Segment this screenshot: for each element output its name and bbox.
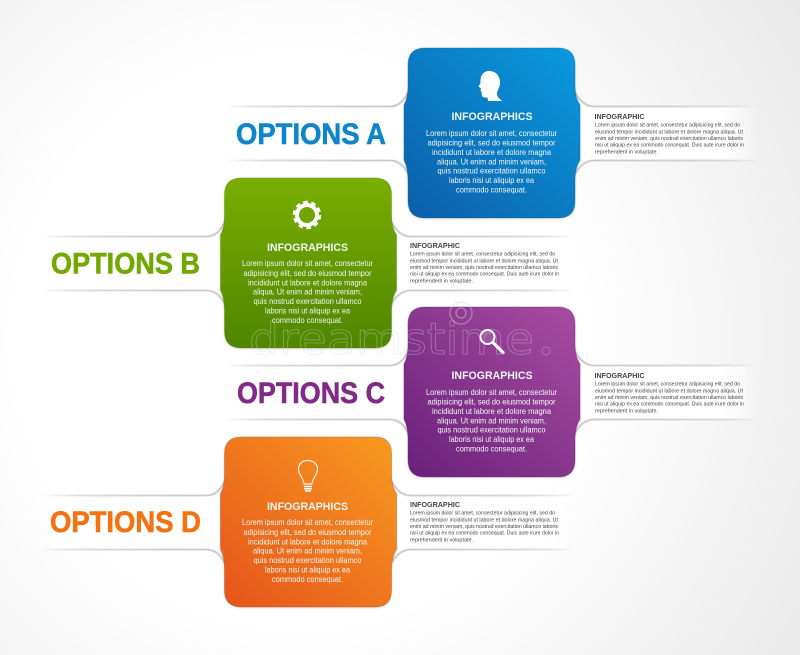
- text block: option D side note: INFOGRAPHIC: [410, 500, 461, 509]
- text block: incididunt ut labore et dolore magna: [248, 538, 368, 546]
- text block: adipisicing elit, sed do eiusmod tempor: [244, 269, 372, 278]
- text block: option B side note: reprehenderit in voluptate.: [410, 278, 473, 284]
- text block: [426, 388, 557, 454]
- text block: [242, 518, 373, 584]
- text block: quis nostrud exercitation ullamco: [254, 297, 362, 306]
- text block: option D side note: enim ad minim veniam, quis nostrud exercitation ullamco laboris: [410, 524, 558, 530]
- heading: options C: OPTIONS C: [237, 377, 385, 410]
- text block: commodo consequat.: [272, 575, 343, 584]
- text block: quis nostrud exercitation ullamco: [438, 426, 546, 434]
- text block: Lorem ipsum dolor sit amet, consectetur: [242, 518, 373, 527]
- text block: option D side note: nisi ut aliquip ex ea commodo consequat. Duis aute irure dolor in: [410, 530, 559, 536]
- text block: laboris nisi ut aliquip ex ea: [449, 435, 534, 444]
- text block: aliqua. Ut enim ad minim veniam,: [253, 546, 362, 556]
- text block: Lorem ipsum dolor sit amet, consectetur: [426, 129, 557, 138]
- text block: option C side note: Lorem ipsum dolor sit amet, consectetur adipisicing elit, sed do: [595, 382, 740, 388]
- text block: adipisicing elit, sed do eiusmod tempor: [244, 528, 372, 537]
- text block: [242, 259, 373, 325]
- text block: commodo consequat.: [456, 444, 527, 454]
- heading: INFOGRAPHICS: [267, 501, 348, 513]
- text block: laboris nisi ut aliquip ex ea: [265, 306, 350, 316]
- icon: gear: [294, 202, 320, 228]
- heading: INFOGRAPHICS: [452, 111, 532, 123]
- text block: option B side note: enim ad minim veniam, quis nostrud exercitation ullamco laboris: [410, 265, 558, 271]
- text block: option B side note: nisi ut aliquip ex ea commodo consequat. Duis aute irure dolor in: [410, 272, 559, 278]
- ribbons: option A: [225, 88, 758, 178]
- text block: option C side note: reprehenderit in voluptate.: [595, 408, 658, 414]
- text block: quis nostrud exercitation ullamco: [438, 166, 546, 176]
- heading: INFOGRAPHICS: [267, 242, 348, 254]
- text block: incididunt ut labore et dolore magna: [432, 407, 552, 416]
- panel: option D card: [220, 437, 396, 608]
- text block: option D side note: [410, 500, 559, 544]
- text block: commodo consequat.: [456, 186, 527, 194]
- text block: option B side note: [410, 241, 559, 284]
- text block: Lorem ipsum dolor sit amet, consectetur: [242, 259, 373, 268]
- ribbons: option B: [42, 218, 574, 308]
- text block: option C side note: [594, 371, 744, 414]
- heading: options D: OPTIONS D: [50, 506, 201, 539]
- text block: incididunt ut labore et dolore magna: [432, 148, 552, 157]
- text block: option A side note: INFOGRAPHIC: [594, 112, 645, 121]
- text block: laboris nisi ut aliquip ex ea: [265, 566, 350, 574]
- heading: INFOGRAPHICS: [452, 370, 532, 382]
- text block: option C side note: INFOGRAPHIC: [594, 371, 645, 380]
- text block: Lorem ipsum dolor sit amet, consectetur: [426, 388, 557, 397]
- text block: commodo consequat.: [272, 316, 343, 325]
- icon: magnifier: [480, 330, 503, 352]
- heading: options A: OPTIONS A: [236, 118, 386, 151]
- heading: options B: OPTIONS B: [51, 248, 200, 280]
- text block: option D side note: eiusmod tempor incididunt ut labore et dolore magna aliqua. Ut: [410, 518, 559, 524]
- text block: option C side note: nisi ut aliquip ex ea commodo consequat. Duis aute irure dolor in: [595, 402, 744, 408]
- text block: [426, 129, 557, 194]
- text block: aliqua. Ut enim ad minim veniam,: [253, 288, 362, 296]
- text block: option D side note: Lorem ipsum dolor sit amet, consectetur adipisicing elit, sed do: [410, 510, 555, 516]
- panel: option A card: [404, 48, 580, 218]
- text block: adipisicing elit, sed do eiusmod tempor: [428, 138, 556, 148]
- ribbons: option C: [225, 347, 758, 437]
- ribbons: option D: [42, 477, 574, 567]
- text block: option B side note: INFOGRAPHIC: [410, 241, 461, 250]
- panel: option B card: [220, 178, 396, 348]
- text block: option A side note: nisi ut aliquip ex ea commodo consequat. Duis aute irure dolor in: [595, 142, 744, 148]
- text block: aliqua. Ut enim ad minim veniam,: [437, 416, 546, 426]
- panel: option C card: [404, 307, 580, 478]
- icon: light bulb: [298, 460, 318, 491]
- text block: adipisicing elit, sed do eiusmod tempor: [428, 398, 556, 406]
- text block: option D side note: reprehenderit in voluptate.: [410, 538, 473, 544]
- text block: option A side note: [594, 112, 744, 156]
- watermark: dreamstime: [249, 314, 534, 365]
- text block: incididunt ut labore et dolore magna: [248, 278, 368, 288]
- text block: option C side note: eiusmod tempor incididunt ut labore et dolore magna aliqua. Ut: [595, 388, 744, 394]
- text block: option B side note: Lorem ipsum dolor sit amet, consectetur adipisicing elit, sed do: [410, 252, 555, 258]
- text block: option A side note: Lorem ipsum dolor sit amet, consectetur adipisicing elit, sed do: [595, 122, 740, 128]
- text block: quis nostrud exercitation ullamco: [254, 556, 362, 565]
- text block: option A side note: reprehenderit in voluptate.: [595, 150, 658, 156]
- text block: option C side note: enim ad minim veniam, quis nostrud exercitation ullamco laboris: [595, 395, 743, 401]
- text block: option B side note: eiusmod tempor incididunt ut labore et dolore magna aliqua. Ut: [410, 258, 559, 264]
- text block: option A side note: eiusmod tempor incididunt ut labore et dolore magna aliqua. Ut: [595, 130, 744, 136]
- text block: laboris nisi ut aliquip ex ea: [449, 176, 534, 185]
- text block: aliqua. Ut enim ad minim veniam,: [437, 158, 546, 166]
- icon: head: [478, 71, 502, 101]
- text block: option A side note: enim ad minim veniam, quis nostrud exercitation ullamco laboris: [595, 136, 743, 142]
